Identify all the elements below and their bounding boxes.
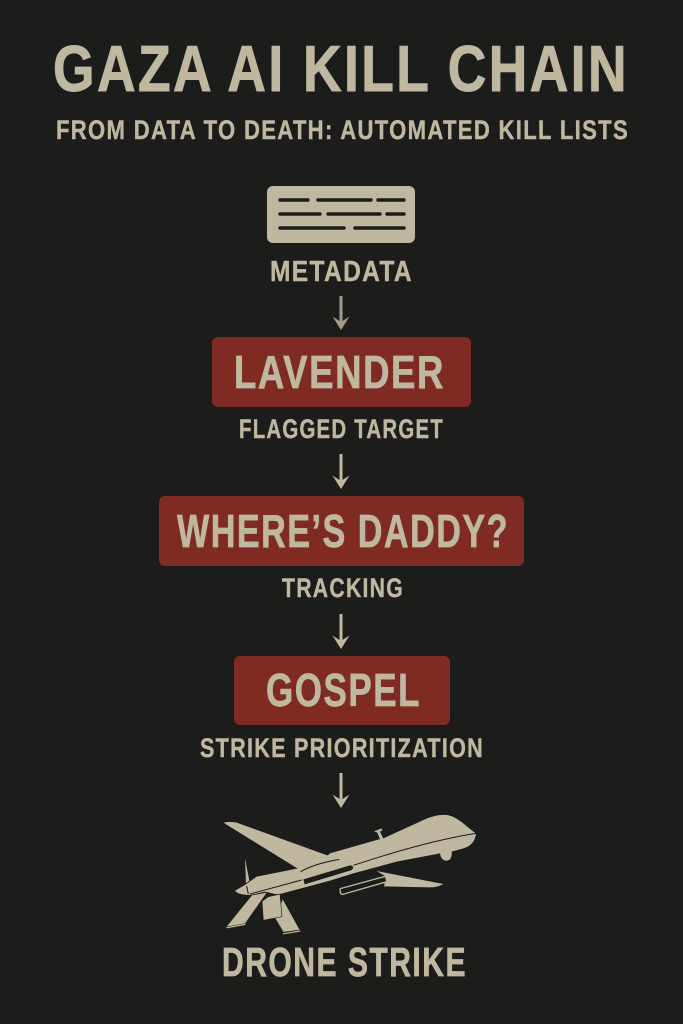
- drone landing gear: [227, 893, 267, 927]
- icon: drone: [223, 815, 476, 934]
- drone wing fairing: [300, 860, 353, 880]
- label: metadata: METADATA: [270, 256, 413, 288]
- drone rear wing: [377, 871, 443, 887]
- arrow: gospel to drone: [332, 773, 350, 808]
- drone antenna: [374, 828, 384, 841]
- arrow: where's daddy to gospel: [332, 614, 350, 649]
- icon: metadata document: [267, 186, 415, 243]
- drone fuselage: [235, 815, 476, 895]
- drone main wing: [223, 822, 338, 870]
- drone propeller: [245, 858, 249, 883]
- label: flagged target: FLAGGED TARGET: [239, 414, 444, 444]
- panel: gospel: [234, 656, 450, 725]
- label: tracking: TRACKING: [282, 573, 404, 603]
- panel: lavender: LAVENDER: [234, 346, 445, 398]
- label: drone strike: DRONE STRIKE: [222, 939, 467, 985]
- drone dark seams: [247, 833, 476, 894]
- drone dark slot: [303, 865, 353, 884]
- panel: where's daddy: [159, 496, 524, 566]
- panel: gospel: GOSPEL: [266, 664, 421, 716]
- label: strike prioritization: STRIKE PRIORITIZATION: [200, 733, 484, 763]
- arrow: metadata to lavender: [332, 296, 350, 330]
- drone missile: [340, 876, 387, 894]
- panel: lavender: [212, 337, 471, 407]
- arrow: lavender to where's daddy: [332, 454, 350, 489]
- panel: where's daddy: WHERE’S DADDY?: [177, 505, 509, 557]
